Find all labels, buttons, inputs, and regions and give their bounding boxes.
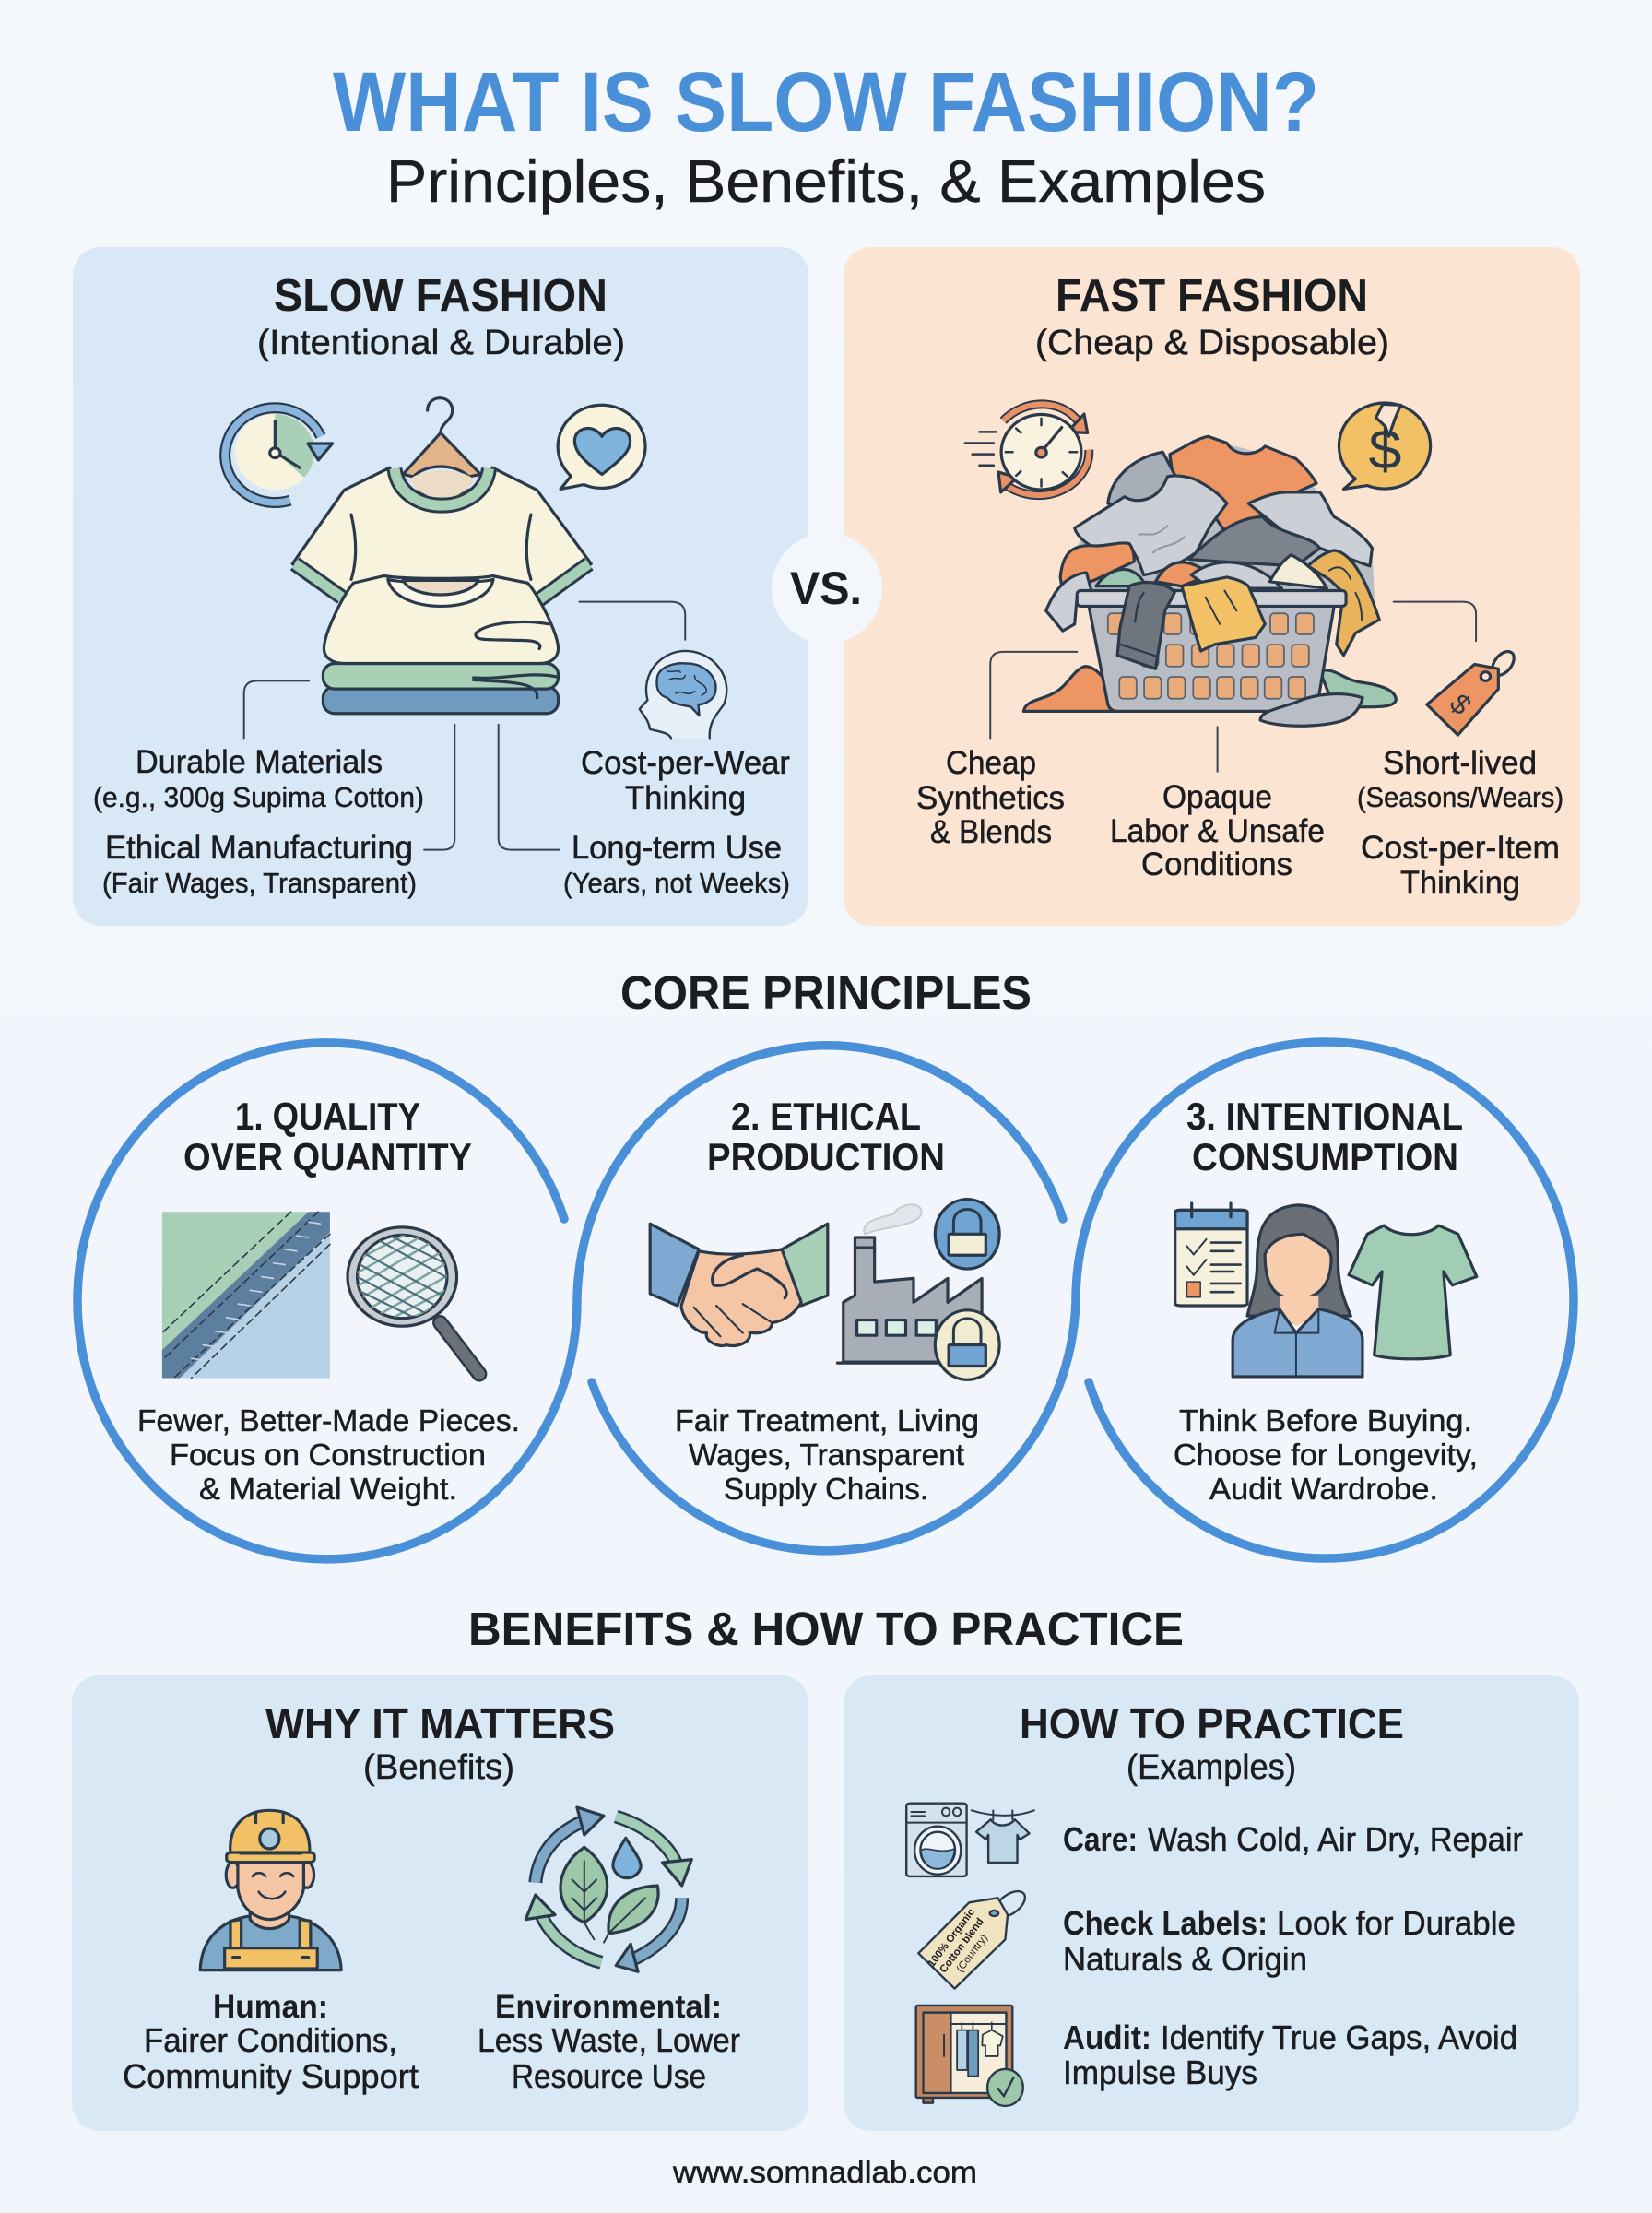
icon: price tag: $ xyxy=(1443,688,1478,721)
benefit: human: Fairer Conditions, xyxy=(144,2021,397,2059)
principle 1 heading: 1. QUALITY xyxy=(235,1095,420,1138)
benefit: human: Community Support xyxy=(123,2057,419,2095)
connector lines xyxy=(990,602,1476,772)
icon: fabric seam and magnifier xyxy=(162,1212,479,1378)
principle 2 text xyxy=(675,1403,979,1506)
principle 2: ethical production xyxy=(650,1095,999,1506)
benefit: environmental xyxy=(478,1989,740,2095)
icon: clock xyxy=(225,408,333,503)
label: durable materials: (e.g., 300g Supima Cotton) xyxy=(93,781,424,813)
illustration: fast fashion laundry basket and icons xyxy=(965,403,1518,772)
panel: how to practice xyxy=(844,1675,1579,2131)
heading: core principles: CORE PRINCIPLES xyxy=(620,966,1032,1019)
principle 3 heading: 3. INTENTIONAL xyxy=(1186,1095,1463,1138)
icon: washing machine and drying shirt xyxy=(906,1804,1034,1876)
icon: speeding clock xyxy=(965,404,1089,495)
icon: clothing label tag: (Country) xyxy=(955,1933,990,1974)
icon: head with brain xyxy=(640,651,726,738)
principle 1 text xyxy=(137,1403,520,1506)
label: cheap synthetics and blends xyxy=(916,745,1065,850)
label: cost-per-item thinking: Cost-per-Item xyxy=(1361,830,1560,866)
text: audit: Identify True Gaps, Avoid xyxy=(1161,2018,1517,2056)
principle 3 text: Audit Wardrobe. xyxy=(1210,1472,1438,1506)
principle 3 heading xyxy=(1186,1095,1463,1178)
icon: worker xyxy=(200,1810,341,1970)
label: ethical manufacturing: Ethical Manufacturing xyxy=(105,830,413,866)
icon: recycling arrows with leaves xyxy=(525,1807,691,1971)
label: short-lived: (Seasons/Wears) xyxy=(1357,781,1564,813)
principle 2 text: Supply Chains. xyxy=(724,1472,928,1506)
label: opaque labor and unsafe conditions: Opaque xyxy=(1162,779,1272,815)
principle 1 text: & Material Weight. xyxy=(199,1472,457,1506)
icon: clothing label tag: Cotton blend xyxy=(938,1916,986,1975)
principle 1 heading xyxy=(183,1095,472,1178)
icon: checklist, person and t-shirt xyxy=(1175,1203,1477,1377)
label: long-term use: Long-term Use xyxy=(572,830,782,866)
principle 1: quality over quantity xyxy=(137,1095,520,1506)
principle 2 heading: PRODUCTION xyxy=(707,1135,945,1178)
principle 1 text: Fewer, Better-Made Pieces. xyxy=(137,1403,520,1438)
icon: handshake xyxy=(650,1224,828,1346)
text: check labels xyxy=(1063,1904,1516,1978)
subheading: intentional and durable: (Intentional & Durable) xyxy=(257,324,625,362)
label: short-lived: Short-lived xyxy=(1383,745,1537,781)
principle 3 heading: CONSUMPTION xyxy=(1192,1135,1458,1178)
text: care: Care: xyxy=(1063,1820,1138,1858)
vs badge xyxy=(772,533,882,644)
label: cheap synthetics and blends: & Blends xyxy=(930,814,1052,850)
label: cost-per-wear thinking: Cost-per-Wear xyxy=(581,745,790,781)
subheading: examples: (Examples) xyxy=(1127,1748,1296,1787)
benefit: environmental: Less Waste, Lower xyxy=(478,2021,740,2059)
icon: broken dollar bubble xyxy=(1339,403,1431,489)
principle 3 text xyxy=(1174,1403,1478,1506)
label: durable materials xyxy=(93,744,424,813)
icon: heart bubble xyxy=(558,405,645,489)
panel: why it matters xyxy=(72,1675,808,2131)
principle 2 text: Wages, Transparent xyxy=(689,1438,964,1472)
subheading: benefits: (Benefits) xyxy=(363,1748,514,1787)
footer url: www.somnadlab.com xyxy=(672,2155,977,2189)
principle 1 heading: OVER QUANTITY xyxy=(183,1135,472,1178)
text: audit: Audit: xyxy=(1063,2018,1151,2056)
text: audit: Impulse Buys xyxy=(1063,2053,1257,2091)
benefit: environmental: Environmental: xyxy=(495,1989,722,2025)
principle 1 text: Focus on Construction xyxy=(170,1438,486,1472)
principle 3 text: Think Before Buying. xyxy=(1179,1403,1472,1438)
label: opaque labor and unsafe conditions xyxy=(1110,779,1325,882)
text: audit xyxy=(1063,2018,1517,2091)
icon: clothing label tag xyxy=(918,1888,1032,1989)
label: durable materials: Durable Materials xyxy=(136,744,383,780)
benefit: human xyxy=(123,1989,419,2095)
heading: why it matters: WHY IT MATTERS xyxy=(266,1699,615,1747)
icon: laundry basket xyxy=(1077,577,1363,726)
icon: broken dollar bubble: $ xyxy=(1368,419,1401,481)
heading: fast fashion: FAST FASHION xyxy=(1056,271,1368,321)
label: ethical manufacturing: (Fair Wages, Transparent) xyxy=(102,867,417,899)
label: long-term use: (Years, not Weeks) xyxy=(563,867,790,899)
icon: factory and locks xyxy=(837,1200,999,1379)
principle 3: intentional consumption xyxy=(1174,1095,1478,1506)
heading: benefits and how to practice: BENEFITS & HOW TO PRACTICE xyxy=(468,1603,1184,1655)
interlocking circle rings xyxy=(77,1042,1574,1559)
icon: price tag xyxy=(1427,648,1518,735)
text: check labels: Naturals & Origin xyxy=(1063,1940,1307,1978)
title xyxy=(333,55,1319,215)
subheading: cheap and disposable: (Cheap & Disposable) xyxy=(1035,324,1389,362)
label: cheap synthetics and blends: Cheap xyxy=(946,745,1036,781)
label: long-term use xyxy=(563,830,790,899)
text: check labels: Check Labels: xyxy=(1063,1904,1268,1942)
panel: fast fashion xyxy=(844,247,1580,926)
principle 2 heading xyxy=(707,1095,945,1178)
heading: slow fashion: SLOW FASHION xyxy=(274,271,608,321)
vs badge: VS. xyxy=(790,562,862,614)
label: ethical manufacturing xyxy=(102,830,417,899)
heading: how to practice: HOW TO PRACTICE xyxy=(1020,1699,1404,1747)
principle 3 text: Choose for Longevity, xyxy=(1174,1438,1478,1472)
label: cheap synthetics and blends: Synthetics xyxy=(916,780,1065,816)
icon: floor clothes xyxy=(1023,667,1396,711)
icon: hanging t-shirt xyxy=(292,467,591,599)
label: cost-per-item thinking: Thinking xyxy=(1400,865,1520,901)
label: opaque labor and unsafe conditions: Labor & Unsafe xyxy=(1110,813,1325,849)
connector lines xyxy=(244,602,685,850)
label: cost-per-wear thinking xyxy=(581,745,790,816)
title: Principles, Benefits, & Examples xyxy=(386,148,1266,215)
icon: clothing label tag: 100% Organic xyxy=(926,1906,977,1970)
icon: wardrobe with check mark xyxy=(916,2006,1023,2106)
principle 2 heading: 2. ETHICAL xyxy=(731,1095,921,1138)
principle 2 text: Fair Treatment, Living xyxy=(675,1403,979,1438)
label: cost-per-item thinking xyxy=(1361,830,1560,901)
label: cost-per-wear thinking: Thinking xyxy=(625,780,746,816)
text: check labels: Look for Durable xyxy=(1277,1904,1516,1942)
benefit: human: Human: xyxy=(213,1989,328,2025)
icon: hanger xyxy=(403,398,480,477)
icon: clothes pile xyxy=(1046,436,1379,656)
text: care: Wash Cold, Air Dry, Repair xyxy=(1148,1820,1523,1858)
label: short-lived xyxy=(1357,745,1564,813)
panel: slow fashion xyxy=(73,247,808,926)
illustration: slow fashion shirts and icons xyxy=(225,398,726,850)
title: WHAT IS SLOW FASHION? xyxy=(333,55,1319,149)
label: opaque labor and unsafe conditions: Conditions xyxy=(1141,846,1292,882)
icon: folded stack xyxy=(323,575,559,714)
benefit: environmental: Resource Use xyxy=(512,2057,706,2095)
